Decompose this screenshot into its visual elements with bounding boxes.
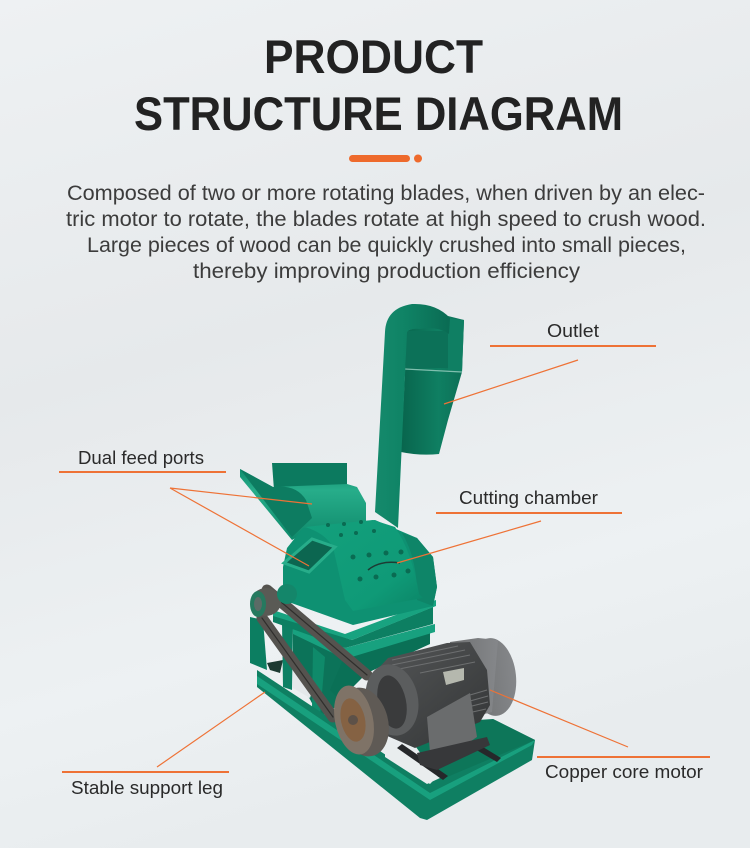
- label: Cutting chamber: Cutting chamber: [459, 488, 598, 508]
- description text: [66, 182, 706, 283]
- cyclone separator: [401, 316, 464, 455]
- terminal box: [427, 693, 477, 760]
- lower stand and table flanges: [273, 600, 436, 700]
- title: PRODUCT: [264, 30, 483, 83]
- label: Outlet: [444, 321, 656, 404]
- description text: tric motor to rotate, the blades rotate at high speed to crush wood.: [66, 208, 706, 231]
- motor mounting rails: [397, 744, 501, 780]
- description text: Large pieces of wood can be quickly crushed into small pieces,: [87, 234, 686, 257]
- title: [134, 30, 623, 140]
- chamber handle: [368, 562, 400, 570]
- drive pulley: [328, 682, 396, 762]
- V-belts: [262, 590, 367, 717]
- discharge pipe: [375, 304, 450, 528]
- motor finned body: [368, 642, 490, 748]
- label: Dual feed ports: Dual feed ports: [78, 448, 204, 468]
- small pulley: [250, 588, 281, 617]
- label: Cutting chamber: [397, 488, 622, 563]
- nameplate: [443, 668, 464, 685]
- motor fan cover: [466, 636, 520, 718]
- description text: Composed of two or more rotating blades, when driven by an elec-: [67, 182, 705, 205]
- hopper back plate: [272, 463, 347, 490]
- label: Dual feed ports: [59, 448, 312, 566]
- label: Copper core motor: Copper core motor: [545, 762, 703, 782]
- electric motor: [359, 636, 520, 770]
- feed port frame: [284, 539, 335, 572]
- machine illustration: [240, 304, 535, 820]
- label: Stable support leg: Stable support leg: [71, 778, 223, 798]
- hopper hood: [240, 469, 366, 540]
- motor end shield: [359, 659, 425, 741]
- motor feet: [417, 737, 490, 770]
- base frame: [257, 670, 535, 820]
- drum bolts: [326, 520, 410, 582]
- label: Copper core motor: [490, 690, 710, 782]
- label: Outlet: Outlet: [547, 321, 599, 341]
- description text: thereby improving production efficiency: [193, 260, 581, 283]
- crusher drum: [283, 520, 437, 625]
- pulley bearing: [277, 584, 297, 604]
- label: Stable support leg: [62, 692, 265, 798]
- title: STRUCTURE DIAGRAM: [134, 87, 623, 140]
- title accent: orange bar and dot: [349, 154, 422, 162]
- support legs and background gaps: [250, 617, 347, 717]
